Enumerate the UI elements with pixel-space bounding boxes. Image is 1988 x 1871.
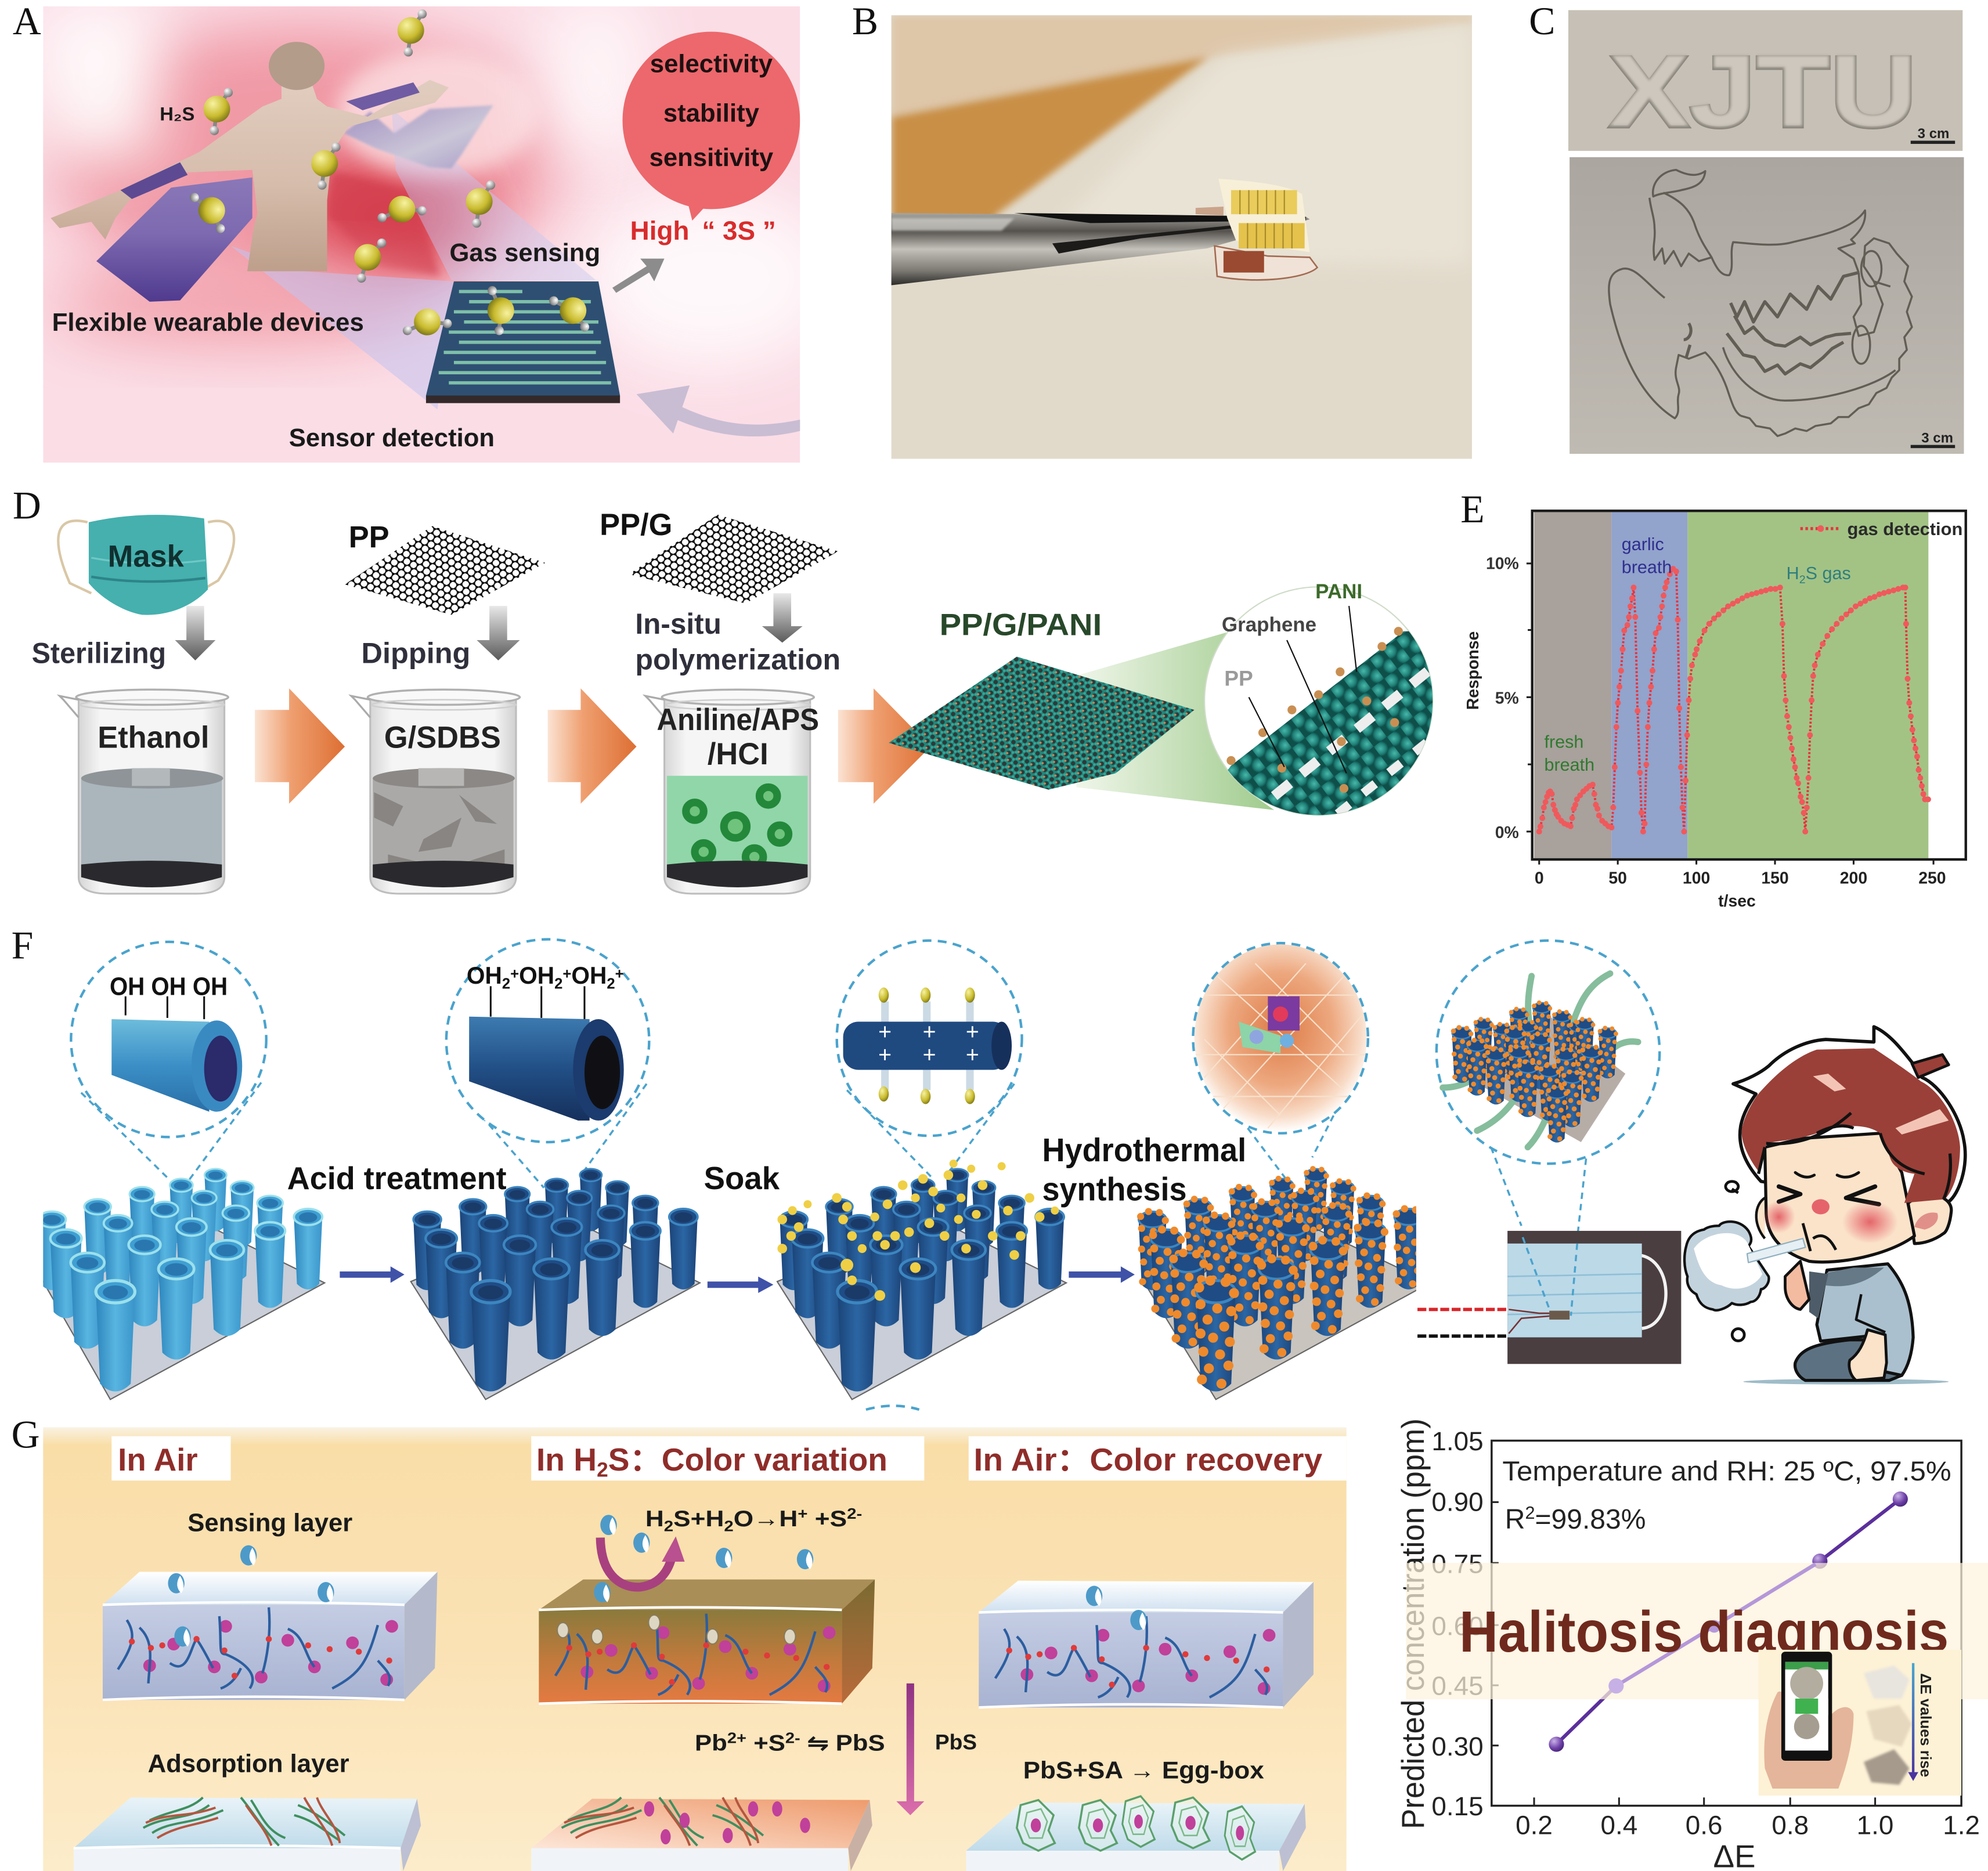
scale bar 3 cm — [1911, 126, 1955, 144]
label: Acid treatment: Acid treatment — [287, 1161, 507, 1196]
label: Gas sensing: Gas sensing — [449, 239, 600, 267]
lens 4: MOF lattice — [1192, 943, 1369, 1180]
background cloud — [43, 0, 837, 463]
speech bubble: 3S properties: sensitivity — [650, 143, 774, 172]
label: egg-box equation: PbS+SA → Egg-box — [1023, 1757, 1264, 1784]
photo background — [892, 15, 1472, 459]
cheeks — [1762, 1201, 1898, 1244]
axis title: Response: Response — [1464, 631, 1482, 710]
annotation: temperature and RH: Temperature and RH: 25 ºC, 97.5% — [1502, 1455, 1951, 1486]
nanotube field 2: acid treated — [411, 1169, 700, 1399]
label: PP/G/PANI: PP/G/PANI — [940, 608, 1102, 642]
sensing block: in air — [103, 1545, 438, 1700]
y tick labels: 10% — [1486, 555, 1519, 573]
arrow: to High 3S — [612, 259, 665, 293]
lens 3: adsorbed metal ions: + — [966, 1019, 979, 1045]
label: PP: PP — [349, 521, 389, 555]
condition bands — [1534, 512, 1928, 858]
beaker: ethanol — [60, 689, 228, 894]
nanotube field 1: pristine — [38, 1169, 324, 1399]
icon: right flexible device — [344, 105, 493, 169]
label: H2S dissociation equation: 2 — [724, 1518, 734, 1535]
lens 2: protonated tube: 2 — [502, 975, 510, 992]
banner title: Halitosis diagnosis: Halitosis diagnosis — [1459, 1599, 1949, 1664]
mouth — [1803, 1223, 1836, 1251]
label: Pb equation: ⇋ PbS — [800, 1730, 885, 1756]
speech bubble: 3S properties: selectivity — [650, 50, 773, 78]
lens 2: protonated tube: OH — [467, 962, 503, 989]
label: Flexible wearable devices: Flexible wearable devices — [52, 308, 364, 337]
annotation: R squared: 2 — [1525, 1503, 1535, 1523]
y tick labels: 1.05 — [1431, 1426, 1484, 1456]
panel F: nanotube synthesis process — [38, 940, 1965, 1410]
tweezers — [892, 213, 1309, 285]
halitosis banner band — [1406, 1563, 1988, 1699]
ticks — [1492, 1502, 1875, 1805]
arm and hand — [1849, 1330, 1886, 1381]
y tick labels — [1486, 555, 1519, 842]
label: H2S dissociation equation: 2- — [847, 1505, 862, 1522]
panel letter A: A — [13, 0, 41, 43]
label: H2S dissociation equation: O→H — [734, 1506, 798, 1532]
label: Sensor detection: Sensor detection — [289, 424, 495, 452]
x tick labels: 0 — [1535, 869, 1544, 887]
arrow: orange step 2 — [548, 688, 637, 804]
label: PbS: PbS — [935, 1729, 977, 1754]
sensor chip — [398, 281, 620, 403]
lens labels: PP — [1224, 666, 1253, 691]
lens 2: protonated tube: OH — [571, 962, 607, 989]
lens 3: adsorbed metal ions: + — [878, 1019, 892, 1045]
legend: gas detection: gas detection — [1848, 519, 1962, 539]
annotation: R squared: =99.83% — [1535, 1504, 1646, 1535]
icon: left flexible device — [96, 178, 252, 302]
adsorption sheet: in H2S — [531, 1797, 872, 1871]
flexible sensor chip — [1196, 179, 1317, 280]
x tick labels — [1516, 1810, 1980, 1840]
lens fragment — [866, 1406, 919, 1410]
arrow: orange step 3 — [838, 688, 930, 804]
y tick labels: 0.45 — [1431, 1670, 1484, 1700]
label: Dipping: Dipping — [362, 637, 470, 669]
label: H2S dissociation equation: + — [798, 1505, 808, 1522]
background — [43, 1428, 1347, 1871]
y tick labels: 0.30 — [1431, 1731, 1484, 1761]
label: Sterilizing: Sterilizing — [32, 637, 166, 669]
x tick labels: 50 — [1608, 869, 1627, 887]
region label: fresh breath: fresh — [1544, 732, 1583, 752]
x tick labels: 200 — [1840, 869, 1867, 887]
ear inner — [1914, 1212, 1938, 1230]
label: High 3S: High “ 3S ” — [630, 215, 776, 245]
beaker: aniline/APS/HCl: Aniline/APS — [656, 703, 819, 737]
H2S molecules — [181, 9, 495, 286]
region label: garlic breath — [1622, 534, 1672, 577]
x tick labels: 1.0 — [1857, 1810, 1893, 1840]
hair front — [1742, 1048, 1960, 1203]
region label: garlic breath: garlic — [1622, 534, 1664, 554]
sensing block: in H2S — [539, 1515, 875, 1704]
scale bar 3 cm: 3 cm — [1918, 126, 1949, 142]
panel C top: XJTU printed pattern — [1568, 10, 1962, 151]
eyes and brows — [1779, 1172, 1879, 1204]
shirt — [1817, 1264, 1913, 1375]
panel G: colour change mechanism — [43, 1428, 1347, 1871]
panel letter C: C — [1529, 0, 1555, 43]
lens 3: adsorbed metal ions: + — [923, 1042, 936, 1067]
region label: H2S gas: H — [1787, 564, 1799, 583]
lens 2: protonated tube: + — [615, 965, 624, 982]
hand holding phone — [1764, 1692, 1853, 1789]
arrow: polymerization — [762, 593, 803, 642]
label: Pb equation: +S — [746, 1730, 785, 1756]
beaker: G/SDBS: G/SDBS — [384, 721, 501, 755]
arrow: step 3 — [1069, 1266, 1135, 1283]
lens 2: protonated tube: 2 — [607, 975, 615, 992]
icon: surgical mask — [58, 515, 234, 615]
magnified lens — [1204, 587, 1439, 824]
icon: arm cuffs — [121, 82, 420, 199]
hair tuft — [1912, 1054, 1949, 1078]
inset: smartphone test — [1759, 1650, 1961, 1796]
arrow: dipping — [477, 606, 520, 660]
scale bar 3 cm: 3 cm — [1921, 430, 1953, 446]
x tick labels: 150 — [1761, 869, 1789, 887]
y tick labels: 0.15 — [1431, 1791, 1484, 1821]
rooster line drawing — [1609, 170, 1912, 436]
hair back and white highlight — [1733, 1027, 1965, 1203]
region label: fresh breath — [1544, 732, 1594, 775]
lens 2: protonated tube — [446, 940, 649, 1188]
hand at chin — [1785, 1261, 1809, 1309]
hair highlights — [1813, 1074, 1949, 1135]
label: H2S dissociation equation: 2 — [664, 1518, 673, 1535]
label: Hydrothermal synthesis — [1042, 1132, 1246, 1208]
arrow: orange step 1 — [255, 688, 345, 804]
x tick labels: 250 — [1918, 869, 1946, 887]
heading box: In H2S: S：Color variation — [608, 1442, 887, 1478]
x tick labels: 0.2 — [1516, 1810, 1553, 1840]
lens labels: PANI — [1315, 580, 1362, 603]
panel letter G: G — [12, 1413, 40, 1456]
panel letter F: F — [12, 923, 33, 967]
panel letter D: D — [13, 483, 41, 527]
x tick labels: 1.2 — [1943, 1810, 1980, 1840]
speech bubble: 3S properties — [623, 32, 800, 221]
label: In-situ polymerization — [635, 608, 840, 676]
region label: fresh breath: breath — [1544, 755, 1594, 775]
breath cloud — [1684, 1222, 1769, 1310]
arrow: sterilizing — [175, 606, 215, 660]
arrow: delta E rising — [1908, 1663, 1918, 1781]
chart frame — [1532, 511, 1966, 859]
lens labels — [1222, 580, 1362, 773]
label: Adsorption layer: Adsorption layer — [148, 1750, 349, 1778]
cartoon: boy with bad breath — [1684, 1027, 1965, 1385]
y tick labels: 0% — [1495, 823, 1519, 842]
y tick labels: 5% — [1495, 689, 1519, 707]
x tick labels — [1535, 869, 1946, 887]
label: Pb equation: 2+ — [727, 1729, 746, 1746]
PP/G mesh — [629, 515, 838, 604]
label: Hydrothermal synthesis: synthesis — [1042, 1172, 1187, 1208]
beaker: aniline/APS/HCl: /HCI — [708, 738, 768, 771]
arrow: step 1 — [340, 1266, 405, 1283]
label: Pb equation: Pb — [695, 1730, 724, 1756]
speech bubble: 3S properties: stability — [663, 99, 760, 128]
annotation: R squared: R — [1505, 1504, 1525, 1535]
x tick labels: 100 — [1683, 869, 1710, 887]
label: H2S: H₂S — [160, 103, 194, 125]
panel B: sensor photo with tweezers — [892, 15, 1472, 459]
figure: human torso — [50, 42, 449, 271]
panel A: wearable gas sensing concept — [43, 0, 837, 463]
nanotube field 4: MOF coated — [1137, 1166, 1430, 1399]
lens 2: protonated tube: + — [562, 965, 571, 982]
data line — [1556, 1499, 1900, 1744]
beaker: ethanol: Ethanol — [98, 721, 209, 755]
label: H2S dissociation equation: +S — [808, 1506, 847, 1532]
heading box: In H2S: 2 — [597, 1459, 608, 1482]
nanotube field 3: soaked with ions — [777, 1160, 1066, 1399]
data points — [1549, 1491, 1908, 1752]
arrow: step 2 — [708, 1277, 773, 1293]
data line through banner — [1608, 1564, 1816, 1693]
data series — [1539, 569, 1928, 832]
label: In-situ polymerization: polymerization — [635, 643, 840, 676]
speech squiggles — [1726, 1182, 1744, 1341]
y tick labels: 0.90 — [1431, 1487, 1484, 1517]
label: PP/G: PP/G — [600, 508, 672, 542]
region label: H2S gas: S gas — [1806, 564, 1851, 583]
lens 1: OH functionalised tube — [71, 942, 266, 1180]
x tick labels: 0.6 — [1686, 1810, 1723, 1840]
y tick labels: 0.60 — [1431, 1611, 1484, 1641]
panel G right: calibration chart — [1395, 1418, 1988, 1871]
heading box: In Air — [111, 1436, 231, 1480]
trousers — [1795, 1340, 1902, 1381]
far-side sleeve of face — [1756, 1198, 1765, 1238]
shirt collar and sleeve — [1809, 1267, 1885, 1332]
heading box: In Air recovery: In Air：Color recovery — [974, 1442, 1323, 1478]
XJTU embossed letters: XJTU — [1609, 34, 1917, 147]
panel C bottom: rooster printed pattern — [1570, 157, 1964, 454]
x tick labels: 0.8 — [1771, 1810, 1809, 1840]
ground shadow — [1743, 1379, 1949, 1385]
tile samples — [1864, 1666, 1912, 1785]
phone — [1781, 1652, 1832, 1761]
label: delta E values rise: ΔE values rise — [1917, 1673, 1935, 1777]
label: H2S dissociation equation: S+H — [673, 1506, 724, 1532]
face — [1765, 1133, 1914, 1262]
breath jet — [1747, 1238, 1805, 1263]
sensing block: recovery — [979, 1581, 1314, 1707]
heading box: In Air: In Air — [118, 1442, 198, 1478]
scale bar 3 cm — [1911, 430, 1955, 448]
beaker: aniline/APS/HCl — [645, 689, 819, 894]
label: Pb equation: 2- — [785, 1729, 800, 1746]
beaker: G/SDBS — [351, 689, 520, 894]
label: Soak: Soak — [704, 1161, 780, 1196]
axis title: t/sec: t/sec — [1718, 892, 1756, 911]
PP mesh — [345, 526, 545, 615]
lens labels: Graphene — [1222, 613, 1316, 636]
wires: red and black dashed — [1417, 1309, 1509, 1336]
hair creases — [1759, 1113, 1950, 1199]
ear — [1908, 1194, 1951, 1244]
curved magenta arrow — [600, 1536, 685, 1587]
heading box: In H2S — [531, 1436, 924, 1482]
y tick labels: 0.75 — [1431, 1549, 1484, 1579]
adsorption sheet: in air — [74, 1797, 421, 1871]
XJTU embossed letters: XJTU — [1609, 35, 1917, 149]
heading box: In H2S: In H — [536, 1442, 596, 1478]
PP/G/PANI mesh — [889, 656, 1195, 790]
adsorption sheet: egg-box — [966, 1796, 1306, 1871]
zoom cone — [1076, 633, 1274, 810]
panel letter E: E — [1460, 487, 1485, 531]
label: Hydrothermal synthesis: Hydrothermal — [1042, 1132, 1246, 1169]
region label: H2S gas: 2 — [1799, 573, 1806, 586]
axis ticks — [1527, 564, 1933, 865]
label: Sensing layer: Sensing layer — [187, 1509, 352, 1537]
y axis title: Predicted concentration (ppm) — [1395, 1418, 1431, 1829]
lens 3: adsorbed metal ions — [837, 941, 1022, 1180]
plot frame — [1492, 1440, 1961, 1806]
lens 2: protonated tube: + — [510, 965, 519, 982]
lens 3: adsorbed metal ions: + — [878, 1042, 892, 1067]
panel letter B: B — [852, 0, 878, 43]
arrow: PbS transfer — [896, 1684, 924, 1815]
label: In-situ polymerization: In-situ — [635, 608, 721, 640]
arrow: curved return — [637, 385, 800, 436]
panel D: fabrication process — [32, 508, 1439, 894]
photo: mask with sensor — [1507, 1231, 1681, 1364]
panel E: response chart — [1464, 511, 1966, 911]
lens 2: protonated tube: OH — [519, 962, 554, 989]
nose — [1812, 1199, 1830, 1215]
lens 3: adsorbed metal ions: + — [966, 1042, 979, 1067]
lens 1: OH functionalised tube: OH OH OH — [110, 973, 228, 1001]
lens 5: gas on nanostructure — [1437, 941, 1659, 1238]
y tick labels — [1431, 1426, 1484, 1821]
lens 3: adsorbed metal ions: + — [923, 1019, 936, 1045]
x tick labels: 0.4 — [1600, 1810, 1637, 1840]
label: H2S dissociation equation: H — [645, 1506, 662, 1532]
region label: garlic breath: breath — [1622, 557, 1672, 577]
lens 2: protonated tube: 2 — [554, 975, 562, 992]
icon: surgical mask: Mask — [108, 540, 185, 573]
